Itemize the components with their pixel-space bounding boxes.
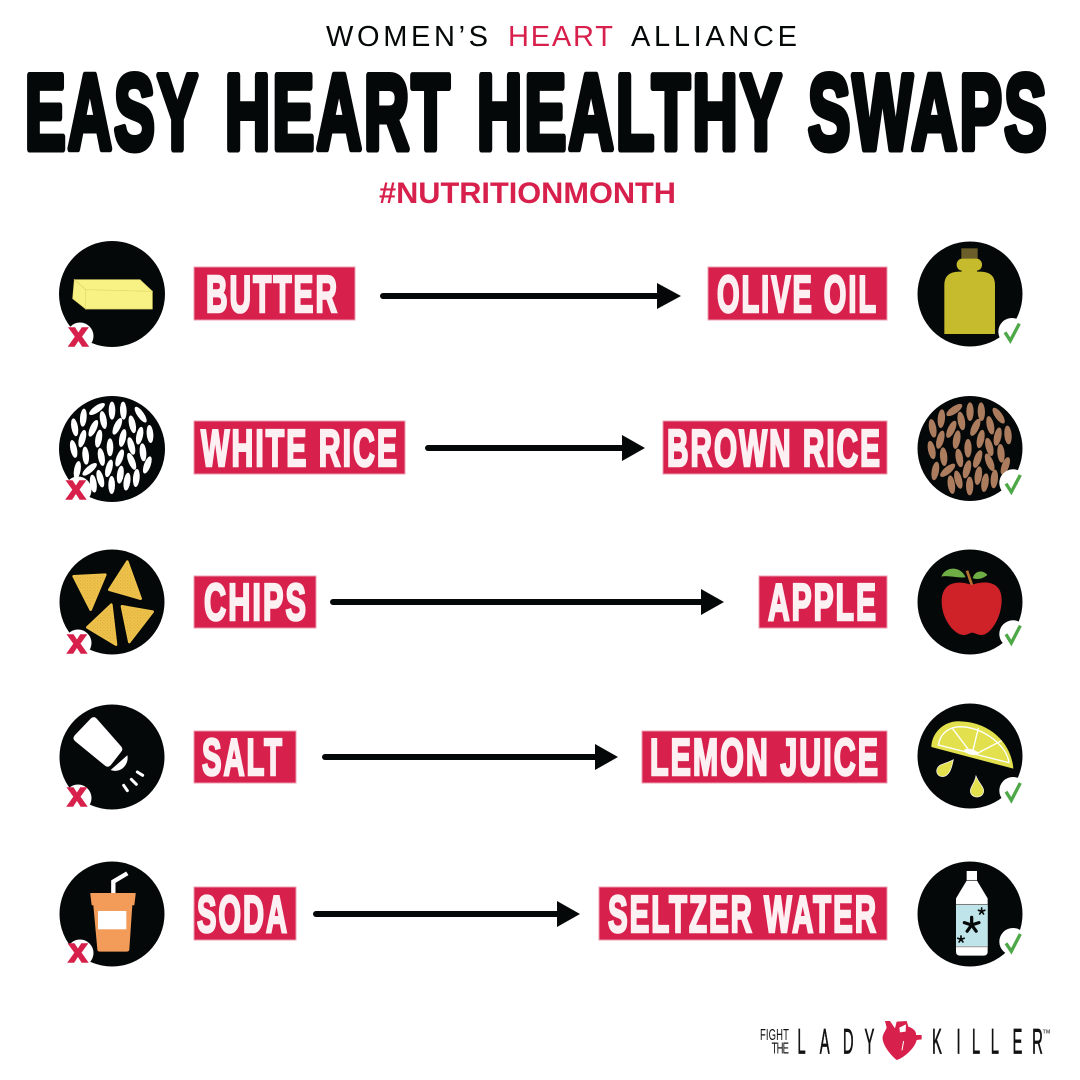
row: butter to olive oil: [59, 241, 1026, 354]
icon: heart: [883, 1021, 922, 1060]
icon: soda: [60, 862, 164, 970]
label: olive oil: [708, 266, 887, 324]
label: soda: SODA: [197, 886, 289, 944]
arrow: [316, 901, 580, 927]
arrow: [428, 435, 645, 461]
icon: butter: x: [69, 316, 88, 354]
title: HEART: [225, 52, 452, 172]
label: white rice: WHITE RICE: [201, 420, 399, 478]
icon: chips: x: [68, 623, 87, 661]
icon: salt: x: [68, 776, 87, 814]
label: apple: [759, 574, 887, 632]
label: olive oil: OLIVE OIL: [717, 266, 878, 324]
organisation name: HEART: [508, 21, 613, 53]
icon: lemon: [918, 704, 1027, 808]
row: chips to apple: [60, 550, 1027, 661]
icon: chips: [60, 550, 164, 661]
arrow: [325, 744, 618, 770]
label: brown rice: BROWN RICE: [667, 420, 882, 478]
organisation name: [326, 21, 797, 53]
label: brown rice: [663, 420, 887, 478]
label: lemon juice: LEMON JUICE: [650, 729, 880, 787]
label: chips: [194, 574, 316, 632]
title: HEALTHY: [477, 52, 784, 172]
row: white rice to brown rice: [59, 396, 1027, 507]
icon: white rice: [59, 396, 165, 507]
icon: olive oil: [918, 242, 1026, 346]
logo: fight the lady killer: [760, 1021, 1051, 1061]
organisation name: ALLIANCE: [631, 21, 797, 53]
label: seltzer water: [599, 886, 887, 944]
logo: fight the lady killer: FIGHT: [760, 1026, 789, 1044]
logo: fight the lady killer: THE: [772, 1039, 789, 1057]
label: salt: [194, 729, 296, 787]
label: chips: CHIPS: [204, 574, 308, 632]
logo: fight the lady killer: KILLER: [932, 1021, 1043, 1061]
row: salt to lemon juice: [60, 704, 1027, 814]
arrow: [333, 589, 724, 615]
label: butter: [194, 266, 355, 324]
label: butter: BUTTER: [206, 266, 339, 324]
icon: salt: [60, 704, 164, 814]
icon: apple: [918, 550, 1027, 654]
icon: brown rice: [918, 396, 1027, 501]
row: soda to seltzer water: [60, 862, 1027, 970]
label: lemon juice: [642, 729, 887, 787]
label: white rice: [194, 420, 405, 478]
organisation name: WOMEN’S: [326, 21, 488, 53]
arrow: [383, 283, 681, 309]
label: seltzer water: SELTZER WATER: [608, 886, 878, 944]
label: salt: SALT: [202, 729, 284, 787]
title: [25, 52, 1049, 172]
logo: fight the lady killer: TM: [1043, 1030, 1051, 1036]
icon: white rice: x: [67, 469, 86, 507]
icon: seltzer bottle: [918, 862, 1027, 966]
logo: fight the lady killer: LADY: [797, 1021, 874, 1061]
hashtag: #NUTRITIONMONTH: [379, 177, 676, 210]
icon: butter: [59, 241, 165, 354]
icon: soda: x: [69, 932, 88, 970]
label: soda: [194, 886, 296, 944]
title: EASY: [25, 52, 200, 172]
label: apple: APPLE: [768, 574, 878, 632]
